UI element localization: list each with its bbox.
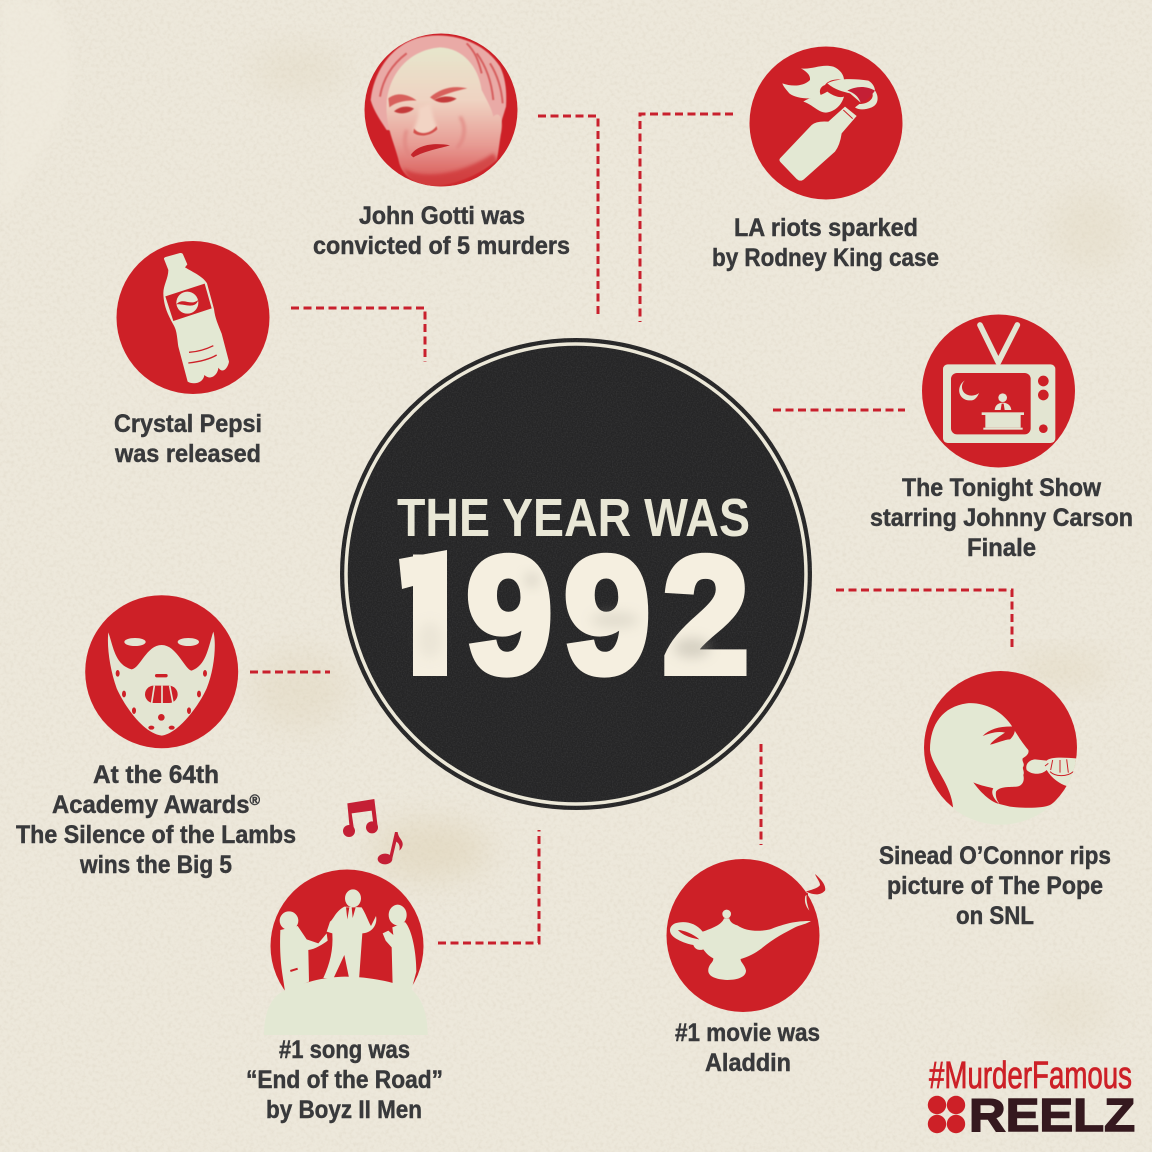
caption: LA riots <box>712 214 939 272</box>
icon: music notes <box>343 799 403 864</box>
caption: Aladdin: #1 movie was <box>675 1019 820 1047</box>
connector: John Gotti <box>538 116 598 316</box>
caption: John Gotti: convicted of 5 murders <box>313 232 570 260</box>
caption: Sinead O'Connor: on SNL <box>956 902 1034 930</box>
caption: Tonight Show: starring Johnny Carson <box>870 504 1133 532</box>
panel: Academy Awards <box>16 595 296 879</box>
caption: LA riots: by Rodney King case <box>712 244 939 272</box>
connector: Tonight Show <box>773 408 905 412</box>
panel: Aladdin <box>666 859 825 1077</box>
caption: Sinead O'Connor: Sinead O’Connor rips <box>879 842 1111 870</box>
caption: Crystal Pepsi: Crystal Pepsi <box>114 410 262 438</box>
heading: 1992 <box>399 550 746 678</box>
panel: Crystal Pepsi <box>114 241 270 468</box>
caption: Crystal Pepsi <box>114 410 262 468</box>
caption: Academy Awards: Academy Awards <box>52 791 259 819</box>
caption: Aladdin: Aladdin <box>705 1049 791 1077</box>
icon: soda bottle <box>116 241 270 394</box>
panel: brand footer <box>928 1055 1135 1141</box>
caption: Academy Awards: At the 64th <box>93 761 219 789</box>
heading: 1992: 1992 <box>370 523 749 707</box>
caption: Tonight Show: The Tonight Show <box>902 474 1102 502</box>
connector: Academy Awards <box>250 670 330 674</box>
REELZ logo text: REELZ <box>969 1089 1135 1141</box>
connector: Crystal Pepsi <box>291 308 425 362</box>
caption: Boyz II Men: “End of the Road” <box>246 1066 443 1094</box>
icon: molotov cocktail <box>750 46 902 200</box>
connector: LA riots <box>640 114 733 322</box>
icon: television <box>922 314 1075 468</box>
caption: Tonight Show: Finale <box>967 534 1036 562</box>
caption: Academy Awards: The Silence of the Lambs <box>16 821 296 849</box>
heading: the year was: THE YEAR WAS <box>397 488 750 548</box>
panel: Boyz II Men <box>246 799 443 1124</box>
caption: LA riots: LA riots sparked <box>734 214 918 242</box>
panel: central year badge <box>340 338 812 810</box>
icon: genie lamp <box>666 859 825 1012</box>
caption: Boyz II Men: by Boyz II Men <box>266 1096 422 1124</box>
caption: Tonight Show <box>870 474 1133 562</box>
caption: Sinead O'Connor <box>879 842 1111 930</box>
caption: John Gotti: John Gotti was <box>359 202 525 230</box>
caption: Crystal Pepsi: was released <box>114 440 261 468</box>
caption: Boyz II Men: #1 song was <box>279 1036 410 1064</box>
panel: John Gotti <box>313 34 570 260</box>
panel: LA riots <box>712 46 939 272</box>
panel: Tonight Show <box>870 314 1133 562</box>
connector: Aladdin <box>760 744 762 845</box>
panel: Sinead O'Connor <box>879 671 1111 930</box>
icon: Hannibal Lecter mask <box>85 595 238 748</box>
icon: REELZ dots <box>928 1096 965 1133</box>
caption: Academy Awards: wins the Big 5 <box>79 851 232 879</box>
caption: Academy Awards <box>16 761 296 879</box>
caption: John Gotti <box>313 202 570 260</box>
caption: Sinead O'Connor: picture of The Pope <box>887 872 1103 900</box>
caption: Academy Awards: ® <box>249 792 260 809</box>
icon: singing trio on a mound <box>264 799 428 1035</box>
icon: portrait of John Gotti <box>364 34 518 190</box>
connector: Sinead O'Connor <box>836 590 1012 650</box>
connector: Boyz II Men <box>438 830 539 943</box>
caption: Aladdin <box>675 1019 820 1077</box>
caption: Boyz II Men <box>246 1036 443 1124</box>
icon: Sinead profile ripping a photo <box>924 671 1078 827</box>
